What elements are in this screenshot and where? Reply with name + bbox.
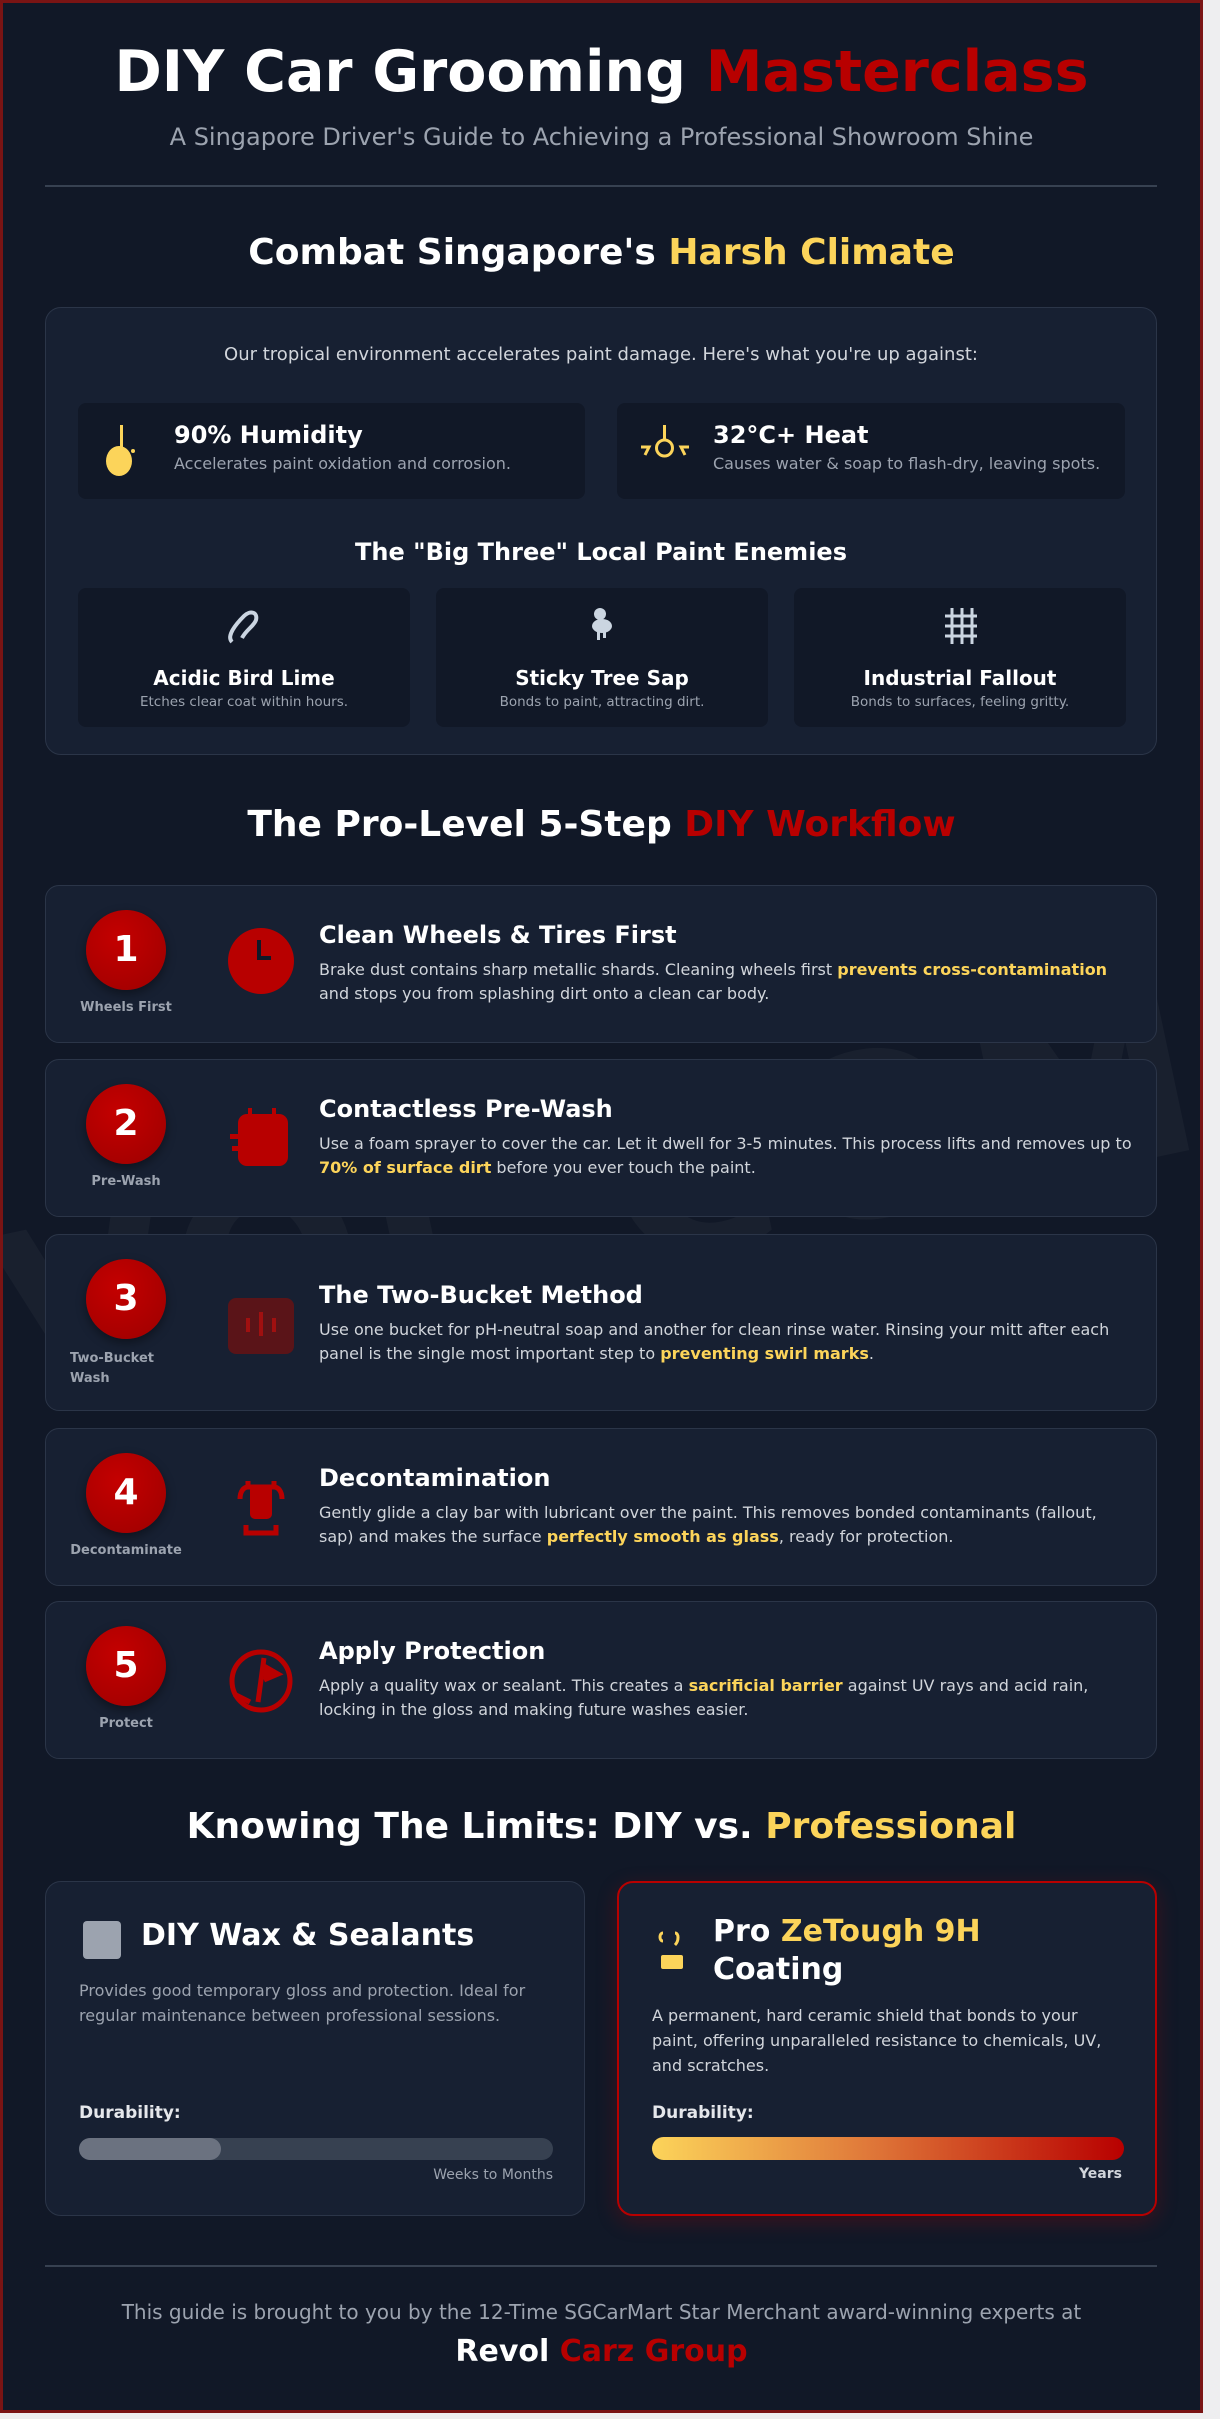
text: humidity: 90% Humidity	[174, 421, 363, 449]
card: fallout: Bonds to surfaces, feeling gritty.	[851, 694, 1069, 710]
heading: workflow: The Pro-Level 5-Step DIY Workflow	[247, 804, 956, 845]
card: tree sap	[436, 588, 768, 727]
footer brand: Revol Carz Group	[455, 2334, 748, 2369]
step 3: The Two-Bucket Method	[319, 1281, 643, 1309]
card: bird lime	[78, 588, 410, 727]
step 5: Protect	[99, 1716, 153, 1731]
step 3: 3	[113, 1278, 139, 1319]
step 5: 5	[113, 1645, 139, 1686]
icon: clay bar	[238, 1481, 284, 1536]
icon: wheel	[228, 928, 294, 994]
step 4	[45, 1428, 1157, 1586]
icon: grid	[945, 608, 977, 644]
step 2: Use a foam sprayer to cover the car. Let it dwell for 3-5 minutes. This process lifts and removes up to 70% of surface dirt before you ever touch the paint.	[319, 1134, 1132, 1177]
step 1: Wheels First	[80, 1000, 172, 1015]
panel: Pro coating	[617, 1881, 1157, 2216]
card: heat	[617, 403, 1125, 499]
step 3: Two-Bucket Wash	[70, 1351, 154, 1386]
icon: bird	[228, 610, 258, 644]
step 5: Apply a quality wax or sealant. This creates a sacrificial barrier against UV rays and acid rain, locking in the gloss and making future washes easier.	[319, 1676, 1088, 1719]
step 2	[45, 1059, 1157, 1217]
panel: DIY wax	[45, 1881, 585, 2216]
step 4: Gently glide a clay bar with lubricant over the paint. This removes bonded contaminants (fallout, sap) and makes the surface perfectly smooth as glass, ready for protection.	[319, 1503, 1097, 1546]
step 3	[45, 1234, 1157, 1411]
heading: limits: Knowing The Limits: DIY vs. Professional	[187, 1806, 1016, 1847]
icon: drop	[106, 425, 135, 476]
title: DIY Car Grooming Masterclass	[114, 39, 1089, 105]
step 4: Decontamination	[319, 1464, 550, 1492]
intro text: Our tropical environment accelerates paint damage. Here's what you're up against:	[224, 344, 978, 365]
icon: shield sparkle	[658, 1932, 683, 1969]
step 2: 2	[113, 1103, 139, 1144]
heading: climate: Combat Singapore's Harsh Climate	[248, 232, 955, 273]
step 3: Use one bucket for pH-neutral soap and another for clean rinse water. Rinsing your mitt after each panel is the single most important step to preventing swirl marks.	[319, 1320, 1109, 1363]
subheading: big three: The "Big Three" Local Paint Enemies	[355, 538, 847, 566]
step 4: 4	[113, 1472, 139, 1513]
bar: DIY durability	[79, 2138, 553, 2160]
panel: Pro coating: Years	[1079, 2166, 1122, 2182]
icon: buckets	[228, 1298, 294, 1354]
panel: Pro coating: Durability:	[652, 2103, 754, 2123]
footer text: This guide is brought to you by the 12-Time SGCarMart Star Merchant award-winning experts at	[122, 2300, 1081, 2324]
panel: DIY wax: DIY Wax & Sealants	[141, 1918, 474, 1953]
panel: DIY wax: Weeks to Months	[433, 2167, 553, 2183]
icon: wax bottle	[83, 1921, 121, 1959]
text: heat: Causes water & soap to flash-dry, leaving spots.	[713, 454, 1100, 473]
step 1: 1	[113, 929, 139, 970]
step 1: Clean Wheels & Tires First	[319, 921, 677, 949]
card: bird lime: Acidic Bird Lime	[153, 666, 335, 690]
step 5: Apply Protection	[319, 1637, 545, 1665]
step 1: Brake dust contains sharp metallic shards. Cleaning wheels first prevents cross-contamination and stops you from splashing dirt onto a clean car body.	[319, 960, 1107, 1003]
text: humidity	[174, 421, 511, 473]
icon: sun	[641, 425, 689, 458]
card: humidity	[78, 403, 585, 499]
icon: sap	[592, 608, 612, 640]
panel: climate	[45, 307, 1157, 755]
step 2: Contactless Pre-Wash	[319, 1095, 613, 1123]
text: humidity: Accelerates paint oxidation and corrosion.	[174, 454, 511, 473]
subtitle: A Singapore Driver's Guide to Achieving a Professional Showroom Shine	[170, 123, 1033, 151]
panel: Pro coating: A permanent, hard ceramic shield that bonds to your paint, offering unparalleled resistance to chemicals, UV, and scratches.	[652, 2006, 1101, 2075]
bar: Pro durability	[652, 2137, 1124, 2160]
step 2: Pre-Wash	[91, 1174, 161, 1189]
card: tree sap: Bonds to paint, attracting dirt.	[500, 694, 704, 710]
text: heat	[713, 421, 1100, 473]
icon: shield	[230, 1650, 292, 1712]
icon: sprayer	[230, 1108, 288, 1166]
step 5	[45, 1601, 1157, 1759]
panel: DIY wax: Durability:	[79, 2103, 181, 2123]
text: heat: 32°C+ Heat	[713, 421, 869, 449]
step 4: Decontaminate	[70, 1543, 182, 1558]
panel: Pro coating: Coating	[713, 1952, 843, 1987]
card: tree sap: Sticky Tree Sap	[515, 666, 689, 690]
panel: Pro coating: Pro ZeTough 9H	[713, 1914, 981, 1949]
card: bird lime: Etches clear coat within hours.	[140, 694, 348, 710]
card: fallout: Industrial Fallout	[864, 666, 1056, 690]
step 1	[45, 885, 1157, 1043]
panel: DIY wax: Provides good temporary gloss and protection. Ideal for regular maintenance between professional sessions.	[79, 1981, 525, 2025]
card: fallout	[794, 588, 1126, 727]
